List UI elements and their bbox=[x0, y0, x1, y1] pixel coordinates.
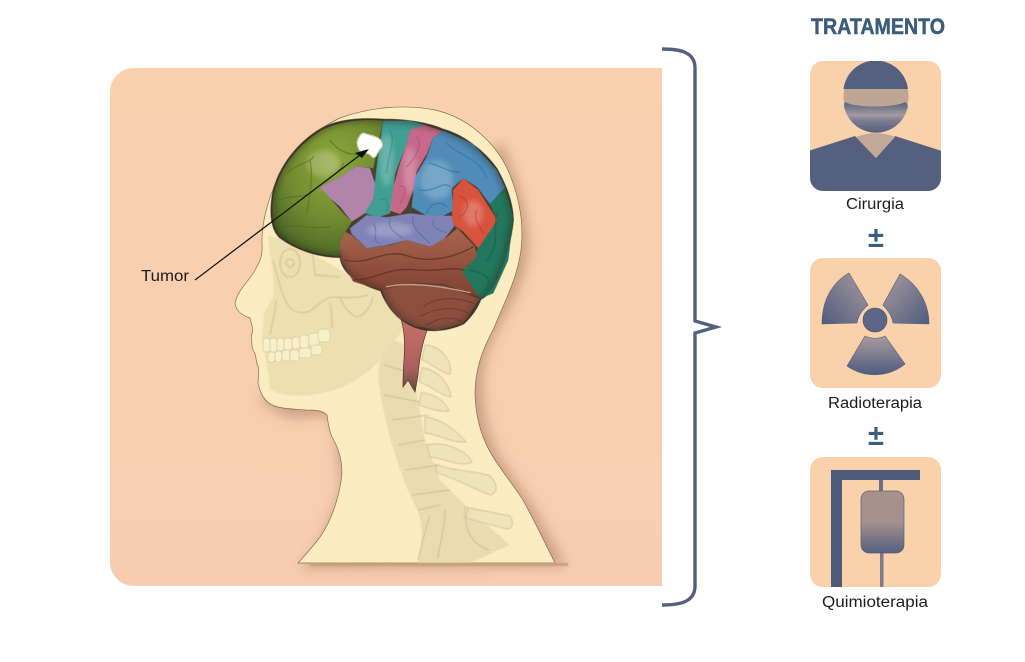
broca purple area bbox=[320, 166, 375, 222]
infographic canvas bbox=[110, 18, 944, 610]
parietal lobe bbox=[412, 131, 505, 216]
teeth bbox=[263, 329, 330, 362]
brain outline backing bbox=[271, 119, 513, 331]
panel: head illustration background bbox=[110, 68, 662, 586]
cerebellum bbox=[382, 283, 480, 331]
brain bbox=[271, 119, 513, 331]
skull bbox=[262, 236, 403, 396]
brain stem bbox=[400, 316, 430, 392]
radiation blade left bbox=[822, 273, 868, 324]
frontal lobe bbox=[272, 120, 383, 256]
occipital red area bbox=[452, 178, 497, 248]
radiation blade bottom bbox=[847, 336, 905, 375]
radiation blade right bbox=[883, 274, 929, 324]
tumor bbox=[357, 133, 382, 157]
label: Quimioterapia: Quimioterapia bbox=[822, 594, 928, 611]
brain shading bbox=[271, 119, 513, 331]
IV bag bbox=[861, 491, 904, 553]
IV tube top bbox=[879, 480, 883, 492]
label: Radioterapia: Radioterapia bbox=[828, 395, 922, 412]
brace bbox=[662, 49, 716, 605]
label: Cirurgia: Cirurgia bbox=[846, 196, 904, 213]
surgical mask bbox=[844, 102, 908, 133]
head anatomy illustration bbox=[235, 107, 568, 568]
heading: TRATAMENTO: TRATAMENTO bbox=[811, 14, 945, 39]
cervical spine bbox=[378, 340, 512, 563]
label: Tumor: Tumor bbox=[141, 268, 189, 285]
sensory cortex bbox=[390, 125, 444, 214]
card: surgery icon bbox=[805, 61, 945, 195]
motor cortex bbox=[365, 121, 424, 217]
surgeon head bbox=[844, 89, 908, 106]
occipital green area bbox=[462, 187, 513, 299]
IV tube bottom bbox=[880, 552, 884, 588]
temporal lobe bbox=[340, 228, 479, 297]
card: chemotherapy icon bbox=[810, 457, 941, 588]
plus-minus sign 1: ± bbox=[868, 222, 884, 254]
plus-minus sign 2: ± bbox=[868, 420, 884, 452]
card: radiotherapy icon bbox=[810, 258, 941, 388]
IV stand bbox=[831, 470, 920, 587]
ear and skull details bbox=[270, 247, 373, 335]
surgeon body bbox=[810, 136, 941, 191]
surgical cap bbox=[844, 61, 908, 89]
head silhouette bbox=[235, 107, 555, 563]
scrub neckline bbox=[856, 133, 895, 158]
head shadow bbox=[258, 140, 566, 568]
temporal upper blue-purple band bbox=[350, 213, 454, 248]
brain fold lines bbox=[280, 130, 497, 325]
tumor arrow bbox=[195, 149, 369, 280]
neck base shadow bbox=[310, 563, 568, 566]
radiation centre bbox=[863, 308, 887, 332]
